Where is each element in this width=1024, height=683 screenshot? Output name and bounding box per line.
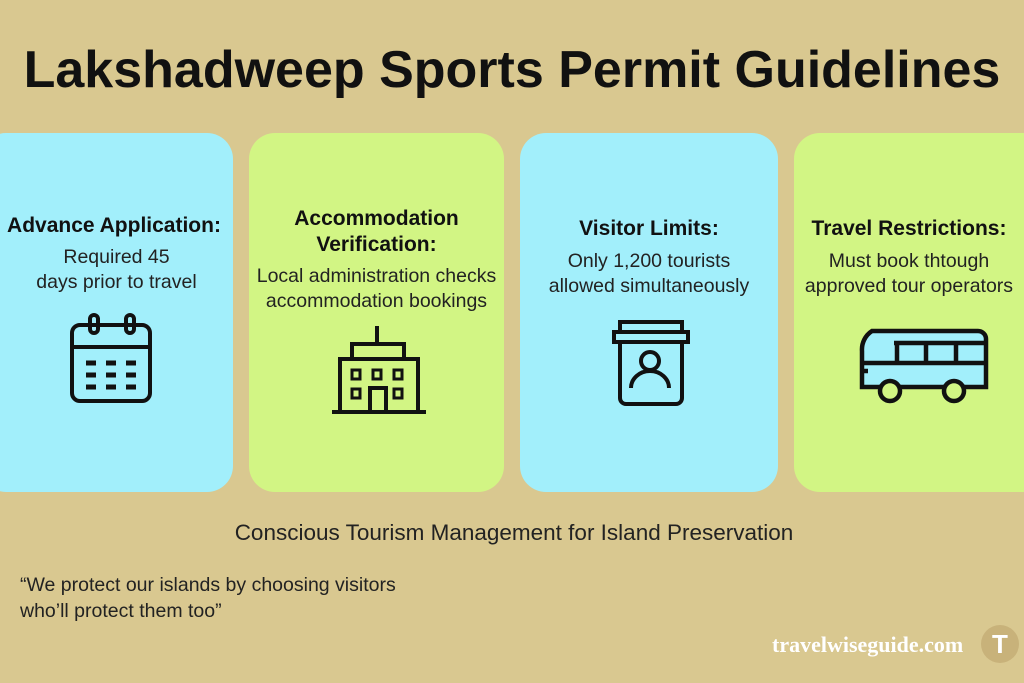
icon: T badge	[981, 625, 1019, 663]
body text: approved tour operators	[805, 275, 1013, 297]
heading	[294, 207, 459, 256]
heading: Accommodation	[294, 207, 459, 230]
panel: advance application	[0, 133, 233, 492]
icon: building	[332, 326, 426, 414]
icon: id badge	[612, 320, 690, 406]
heading: Advance Application:	[7, 214, 221, 237]
icon: bus	[860, 328, 988, 404]
body text: allowed simultaneously	[549, 275, 749, 297]
subtitle: Conscious Tourism Management for Island Preservation	[235, 520, 793, 545]
body text: accommodation bookings	[266, 290, 487, 312]
heading: Verification:	[316, 233, 437, 256]
body text	[257, 265, 496, 312]
logo: travelwiseguide: travelwiseguide.com	[772, 632, 963, 657]
panel: travel restrictions	[794, 133, 1024, 492]
heading: Travel Restrictions:	[812, 217, 1006, 240]
heading: Visitor Limits:	[579, 217, 719, 240]
body text	[36, 246, 197, 293]
body text	[549, 250, 750, 297]
title: Lakshadweep Sports Permit Guidelines	[24, 41, 1000, 99]
body text: days prior to travel	[36, 271, 197, 293]
quote	[20, 574, 396, 622]
body text	[805, 250, 1013, 297]
panel: visitor limits	[520, 133, 778, 492]
icon: calendar	[70, 313, 152, 403]
panel: accommodation verification	[249, 133, 504, 492]
icon: T badge: T	[992, 629, 1008, 659]
body text: Required 45	[63, 246, 170, 268]
quote: “We protect our islands by choosing visitors	[20, 574, 396, 596]
quote: who’ll protect them too”	[20, 600, 222, 622]
body text: Local administration checks	[257, 265, 496, 287]
body text: Only 1,200 tourists	[568, 250, 730, 272]
body text: Must book thtough	[829, 250, 989, 272]
logo: travelwiseguide	[772, 625, 1019, 663]
